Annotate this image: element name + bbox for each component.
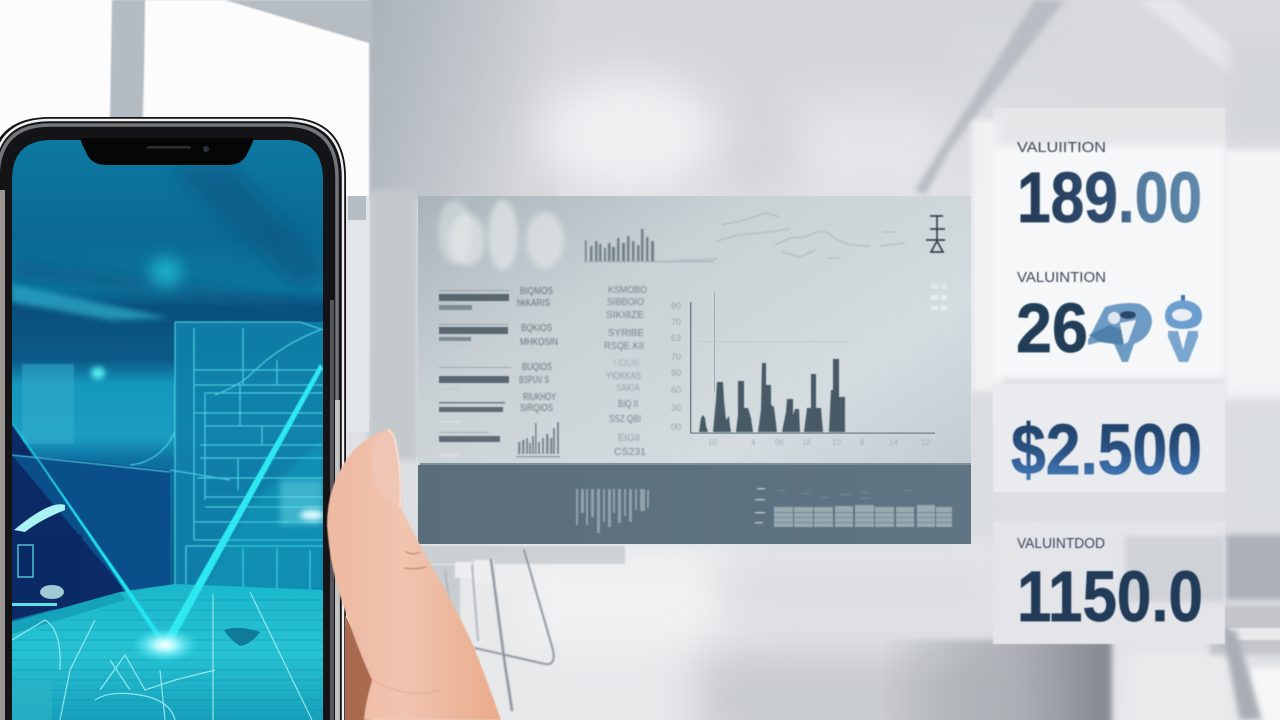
right text column xyxy=(604,284,647,458)
bar chart y axis labels xyxy=(671,301,681,432)
middle text column: RIUKHOY xyxy=(523,391,556,403)
stat card 2: VALUINTION xyxy=(1017,270,1106,286)
floor wireframe xyxy=(12,592,312,720)
middle text column: BQKIOS xyxy=(521,322,552,334)
bar chart y axis labels: 70 xyxy=(671,352,681,362)
right text column: CS231 xyxy=(614,446,646,458)
hand holding phone xyxy=(327,429,501,720)
chair behind the panel xyxy=(420,546,625,710)
icon: blue figure xyxy=(1165,295,1202,362)
right text column: SIKI8ZE xyxy=(606,309,644,321)
right text column: RSQE.KII xyxy=(604,340,644,352)
right text column: SAKIA xyxy=(616,382,640,394)
phone body xyxy=(0,117,346,720)
middle text column: hkKARIS xyxy=(517,297,550,309)
bar chart y axis labels: 90 xyxy=(671,368,681,378)
right text column: SSZ QBI xyxy=(609,413,641,425)
mini area chart xyxy=(584,229,714,262)
small bar sparkline xyxy=(516,422,560,457)
bar chart y axis labels: 30 xyxy=(671,403,681,413)
phone xyxy=(0,117,346,720)
bottom dark band xyxy=(418,465,971,544)
bar chart x axis labels: 10 xyxy=(708,438,717,447)
middle text column: BUQIOS xyxy=(522,361,552,373)
right text column: SYRIBE xyxy=(608,327,644,339)
phone notch xyxy=(80,138,254,165)
bar chart xyxy=(671,292,935,447)
holographic room wireframe xyxy=(12,322,323,596)
stat card 2 xyxy=(1016,270,1202,367)
left metric bars xyxy=(439,290,511,457)
stat card 2: 26 xyxy=(1016,289,1088,367)
middle text column: BIQMOS xyxy=(520,285,553,297)
floor xyxy=(12,584,323,720)
bar chart x axis labels: 8 xyxy=(860,438,865,447)
stat cards backing xyxy=(993,108,1225,644)
bar chart x axis labels: 12 xyxy=(921,438,930,447)
stat card 1: VALUIITION xyxy=(1017,140,1106,156)
right text column: I IOUAI xyxy=(614,357,639,369)
middle text column: BSPUV S xyxy=(519,374,549,386)
left room objects xyxy=(12,504,82,606)
bar chart y axis labels: 00 xyxy=(671,422,681,432)
bar chart y axis labels: 63 xyxy=(671,333,681,343)
bar chart x axis labels: 06 xyxy=(775,438,784,447)
middle text column: MHKOSIN xyxy=(520,336,558,348)
bar chart x axis labels: 18 xyxy=(802,438,811,447)
small white legend xyxy=(931,284,947,310)
stat card 4: 1150.0 xyxy=(1017,558,1203,637)
bar chart x axis labels: 4 xyxy=(751,438,756,447)
stat card 4: VALUINTDOD xyxy=(1017,536,1105,552)
phone screen xyxy=(12,140,323,720)
right text column: EIGII xyxy=(618,432,640,444)
bar chart y axis labels: 90 xyxy=(671,301,681,311)
middle text column: SIRQIOS xyxy=(520,402,553,414)
middle text column xyxy=(517,285,558,414)
faint line chart xyxy=(680,213,905,260)
band small table xyxy=(576,488,952,533)
bar chart y axis labels: 60 xyxy=(671,385,681,395)
bar chart x axis labels: 10 xyxy=(832,438,841,447)
right text column: KSMOBO xyxy=(608,284,647,296)
bar chart x axis labels: 14 xyxy=(889,438,898,447)
right text column: SIBBOIO xyxy=(607,296,644,308)
icon: laser beams xyxy=(12,364,324,663)
icon: blue emblem xyxy=(1088,303,1152,362)
stat card 3: $2.500 xyxy=(1011,411,1202,490)
bar chart y axis labels: 70 xyxy=(671,317,681,327)
right text column: BIQ II xyxy=(618,398,638,410)
right text column: YIOKKAS xyxy=(606,370,641,382)
corner glyph xyxy=(926,216,945,252)
stat card 1: 189.00 xyxy=(1017,159,1202,238)
bar chart x axis labels xyxy=(708,438,930,447)
